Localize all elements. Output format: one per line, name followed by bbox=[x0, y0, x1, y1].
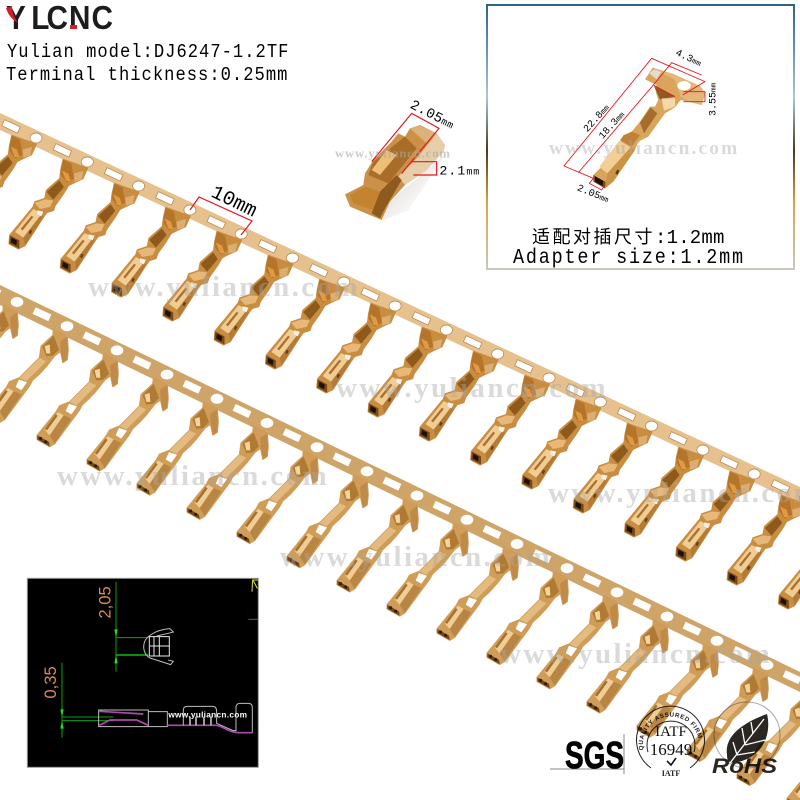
logo: RoHS leaf bbox=[712, 702, 780, 778]
panel: adapter size inset bbox=[487, 5, 794, 269]
watermarks: www.yuliancn.com bbox=[336, 372, 608, 404]
watermarks: www.yuliancn.com bbox=[88, 271, 360, 303]
pitch dimension: 10mm: 10mm bbox=[207, 182, 260, 223]
model text bbox=[6, 41, 289, 86]
inset terminal with dimensions: 22.8mm bbox=[581, 102, 612, 134]
inset terminal with dimensions: 4.3mm bbox=[674, 47, 703, 69]
panel: CAD drawing: www.yuliancn.com bbox=[167, 709, 247, 719]
terminal strip: upper bbox=[0, 96, 800, 609]
crimp close-up with dimensions: 2.05mm bbox=[407, 98, 457, 133]
inset terminal with dimensions: 3.55mm bbox=[708, 82, 719, 116]
logo: IATF 16949: 16949 bbox=[650, 740, 692, 759]
inset caption: 适配对插尺寸:1.2mm bbox=[532, 227, 725, 249]
cross-section outline bbox=[144, 629, 173, 665]
watermarks: www.yuliancn.com bbox=[500, 638, 772, 670]
crimp close-up with dimensions: 2.1mm bbox=[439, 164, 480, 179]
watermarks: www.yuliancn.com bbox=[280, 541, 552, 573]
side-view outline bbox=[99, 703, 253, 733]
dimension 0,35 bbox=[41, 663, 113, 738]
dimension 2,05: 2,05 bbox=[96, 586, 115, 619]
inset terminal with dimensions: 2.05mm bbox=[576, 183, 611, 205]
model text: Yulian model:DJ6247-1.2TF bbox=[7, 41, 289, 63]
certification logos bbox=[550, 702, 780, 778]
inset terminal with dimensions: www.yuliancn.com bbox=[549, 138, 739, 159]
model text: Terminal thickness:0.25mm bbox=[6, 64, 288, 86]
logo: RoHS leaf: RoHS bbox=[712, 755, 777, 778]
logo: SGS: SGS bbox=[565, 735, 624, 777]
logo: IATF 16949: IATF bbox=[655, 724, 687, 740]
watermarks bbox=[57, 271, 800, 670]
inset caption: Adapter size:1.2mm bbox=[513, 246, 745, 269]
pitch dimension: 10mm bbox=[190, 182, 260, 235]
inset terminal with dimensions: 18.3mm bbox=[597, 109, 627, 141]
logo: SGS bbox=[550, 734, 624, 777]
logo: YLCNC: YLCNC bbox=[6, 0, 113, 36]
crimp close-up with dimensions: www.yuliancn.com bbox=[335, 146, 451, 160]
crimp close-up with dimensions bbox=[335, 98, 480, 221]
logo: IATF 16949: QUALITY ASSURED FIRM bbox=[638, 712, 702, 750]
logo: IATF 16949 bbox=[636, 706, 705, 778]
dimension 2,05 bbox=[96, 582, 148, 672]
terminal strip: lower bbox=[0, 259, 800, 800]
dimension 0,35: 0,35 bbox=[41, 666, 60, 699]
panel: CAD drawing bbox=[27, 578, 258, 767]
inset terminal with dimensions bbox=[549, 47, 739, 205]
inset caption bbox=[513, 227, 745, 269]
watermarks: www.yuliancn.com bbox=[57, 460, 329, 492]
logo: IATF 16949: IATF bbox=[662, 769, 680, 778]
